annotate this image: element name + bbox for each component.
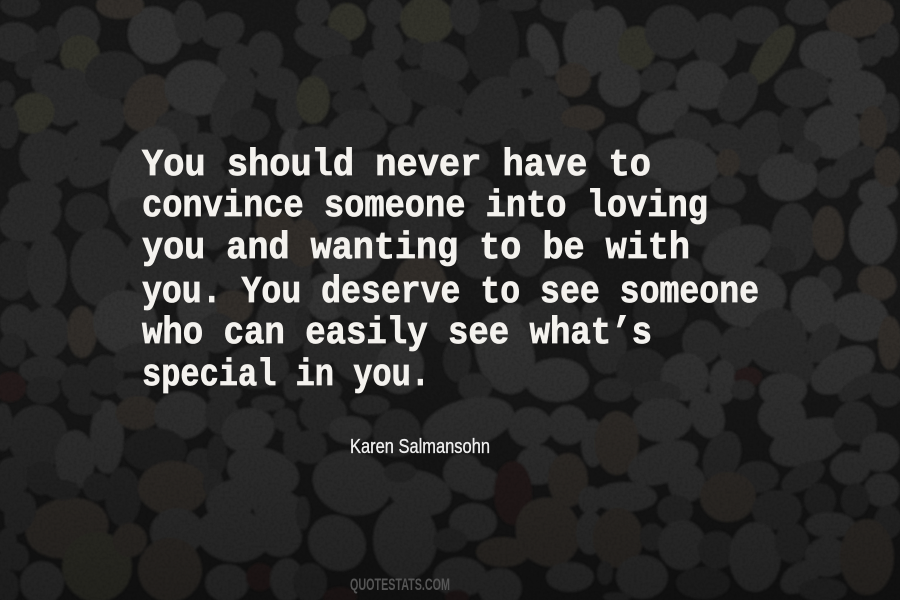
quote text	[142, 144, 759, 397]
quote text: You should never have to	[142, 144, 651, 187]
quote text: you and wanting to be with	[142, 227, 690, 270]
watermark: QUOTESTATS.COM	[350, 575, 450, 594]
author name: Karen Salmansohn	[350, 436, 490, 458]
quote text: convince someone into loving	[142, 185, 708, 228]
quote text: special in you.	[142, 354, 430, 397]
quote text: who can easily see what’s	[142, 312, 652, 355]
quote text: you. You deserve to see someone	[142, 271, 759, 314]
